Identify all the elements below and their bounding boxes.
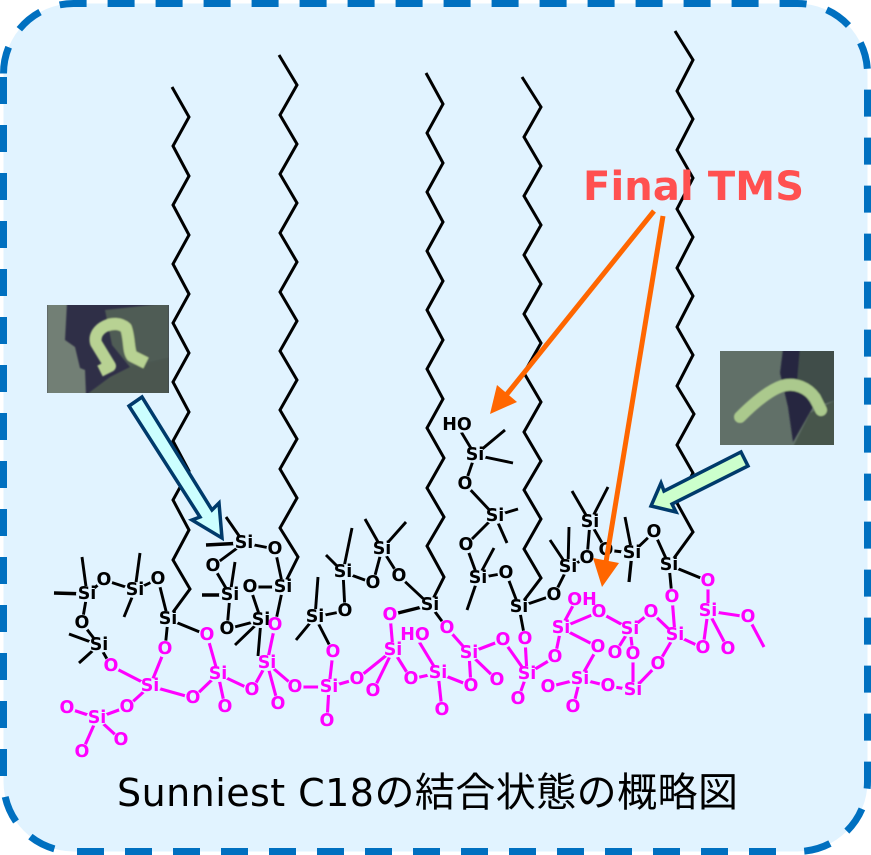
black atom labels: Si xyxy=(559,557,577,577)
magenta atom labels: O xyxy=(440,618,454,638)
magenta atom labels: Si xyxy=(571,669,589,689)
black atom labels: O xyxy=(151,569,165,589)
black atom labels: Si xyxy=(235,533,253,553)
black atom labels: Si xyxy=(660,555,678,575)
magenta atom labels: HO xyxy=(400,625,430,645)
black atom labels: Si xyxy=(78,584,96,604)
magenta atom labels: O xyxy=(591,637,605,657)
magenta atom labels: O xyxy=(245,680,259,700)
black atom labels: O xyxy=(458,474,472,494)
black siloxane bonds and methyl groups xyxy=(54,425,708,666)
magenta atom labels: O xyxy=(721,639,735,659)
magenta atom labels: O xyxy=(435,700,449,720)
atom halos that leave gaps around labels xyxy=(58,417,756,760)
black atom labels: Si xyxy=(510,597,528,617)
black atom labels: O xyxy=(75,613,89,633)
magenta atom labels: Si xyxy=(699,601,717,621)
black atom labels: O xyxy=(97,570,111,590)
black atom labels: O xyxy=(599,540,613,560)
arrow: green block arrow from straight caterpillar xyxy=(651,452,748,512)
black atom labels: Si xyxy=(466,445,484,465)
black atom labels: Si xyxy=(469,568,487,588)
black atom labels: Si xyxy=(581,512,599,532)
magenta atom labels: O xyxy=(288,677,302,697)
magenta atom labels: Si xyxy=(141,676,159,696)
magenta atom labels: O xyxy=(665,587,679,607)
C18 alkyl chains xyxy=(168,31,694,619)
magenta atom labels: Si xyxy=(518,664,536,684)
black atom labels: Si xyxy=(421,595,439,615)
black atom labels: O xyxy=(392,566,406,586)
magenta atom labels: Si xyxy=(209,664,227,684)
black atom labels: O xyxy=(268,539,282,559)
black atom labels: O xyxy=(338,601,352,621)
magenta atom labels: O xyxy=(320,711,334,731)
magenta atom labels: Si xyxy=(621,619,639,639)
magenta atom labels: Si xyxy=(429,663,447,683)
magenta atom labels: O xyxy=(158,639,172,659)
magenta atom labels: O xyxy=(383,605,397,625)
magenta atom labels: Si xyxy=(552,618,570,638)
magenta atom labels xyxy=(60,571,755,762)
black atom labels: O xyxy=(243,577,257,597)
arrow: orange to upper TMS xyxy=(490,211,654,414)
black atom labels: Si xyxy=(221,585,239,605)
magenta atom labels: O xyxy=(741,607,755,627)
black atom labels: Si xyxy=(159,609,177,629)
magenta atom labels: O xyxy=(608,643,622,663)
magenta atom labels: O xyxy=(200,625,214,645)
black atom labels: O xyxy=(580,548,594,568)
black atom labels: Si xyxy=(90,635,108,655)
black atom labels: Si xyxy=(252,610,270,630)
magenta atom labels: O xyxy=(404,669,418,689)
magenta silica surface bonds xyxy=(67,581,764,752)
magenta atom labels: Si xyxy=(666,625,684,645)
black atom labels: Si xyxy=(126,580,144,600)
photo: straight caterpillar xyxy=(720,349,836,447)
magenta atom labels: O xyxy=(464,676,478,696)
magenta atom labels: O xyxy=(186,688,200,708)
black atom labels: O xyxy=(459,535,473,555)
magenta atom labels: O xyxy=(566,697,580,717)
magenta atom labels: O xyxy=(490,670,504,690)
magenta atom labels: Si xyxy=(320,677,338,697)
magenta atom labels: O xyxy=(696,638,710,658)
black atom labels: O xyxy=(220,619,234,639)
magenta atom labels: O xyxy=(518,629,532,649)
black atom labels: Si xyxy=(623,543,641,563)
magenta atom labels: O xyxy=(326,642,340,662)
magenta atom labels: O xyxy=(496,630,510,650)
magenta atom labels: Si xyxy=(258,653,276,673)
magenta atom labels: O xyxy=(592,602,606,622)
magenta atom labels: O xyxy=(75,742,89,762)
magenta atom labels: O xyxy=(651,654,665,674)
magenta atom labels: O xyxy=(114,730,128,750)
black atom labels xyxy=(75,415,678,655)
magenta atom labels: Si xyxy=(624,680,642,700)
black atom labels: Si xyxy=(306,607,324,627)
arrow: orange to lower TMS xyxy=(593,216,663,587)
black atom labels: HO xyxy=(442,415,472,435)
black atom labels: O xyxy=(366,573,380,593)
black atom labels: Si xyxy=(373,539,391,559)
black atom labels: O xyxy=(499,563,513,583)
magenta atom labels: O xyxy=(104,656,118,676)
magenta atom labels: O xyxy=(541,677,555,697)
caption: Sunniest C18の結合状態の概略図 xyxy=(117,760,738,818)
magenta atom labels: O xyxy=(366,681,380,701)
magenta atom labels: O xyxy=(60,698,74,718)
magenta atom labels: O xyxy=(120,697,134,717)
magenta atom labels: OH xyxy=(567,590,597,610)
magenta atom labels: Si xyxy=(460,643,478,663)
photo: looping caterpillar xyxy=(47,303,169,395)
magenta atom labels: O xyxy=(350,669,364,689)
magenta atom labels: O xyxy=(511,689,525,709)
magenta atom labels: Si xyxy=(384,640,402,660)
magenta atom labels: O xyxy=(548,647,562,667)
magenta atom labels: Si xyxy=(88,708,106,728)
magenta atom labels: O xyxy=(268,615,282,635)
black atom labels: O xyxy=(206,556,220,576)
heading: Final TMS: Final TMS xyxy=(583,164,804,210)
magenta atom labels: O xyxy=(626,644,640,664)
black atom labels: Si xyxy=(486,506,504,526)
magenta atom labels: O xyxy=(644,602,658,622)
arrow: cyan block arrow from looping caterpillar xyxy=(129,397,222,538)
magenta atom labels: O xyxy=(601,676,615,696)
black atom labels: O xyxy=(547,585,561,605)
black atom labels: O xyxy=(647,522,661,542)
black atom labels: Si xyxy=(274,577,292,597)
magenta atom labels: O xyxy=(218,697,232,717)
magenta atom labels: O xyxy=(701,571,715,591)
black atom labels: Si xyxy=(334,562,352,582)
magenta atom labels: O xyxy=(271,694,285,714)
